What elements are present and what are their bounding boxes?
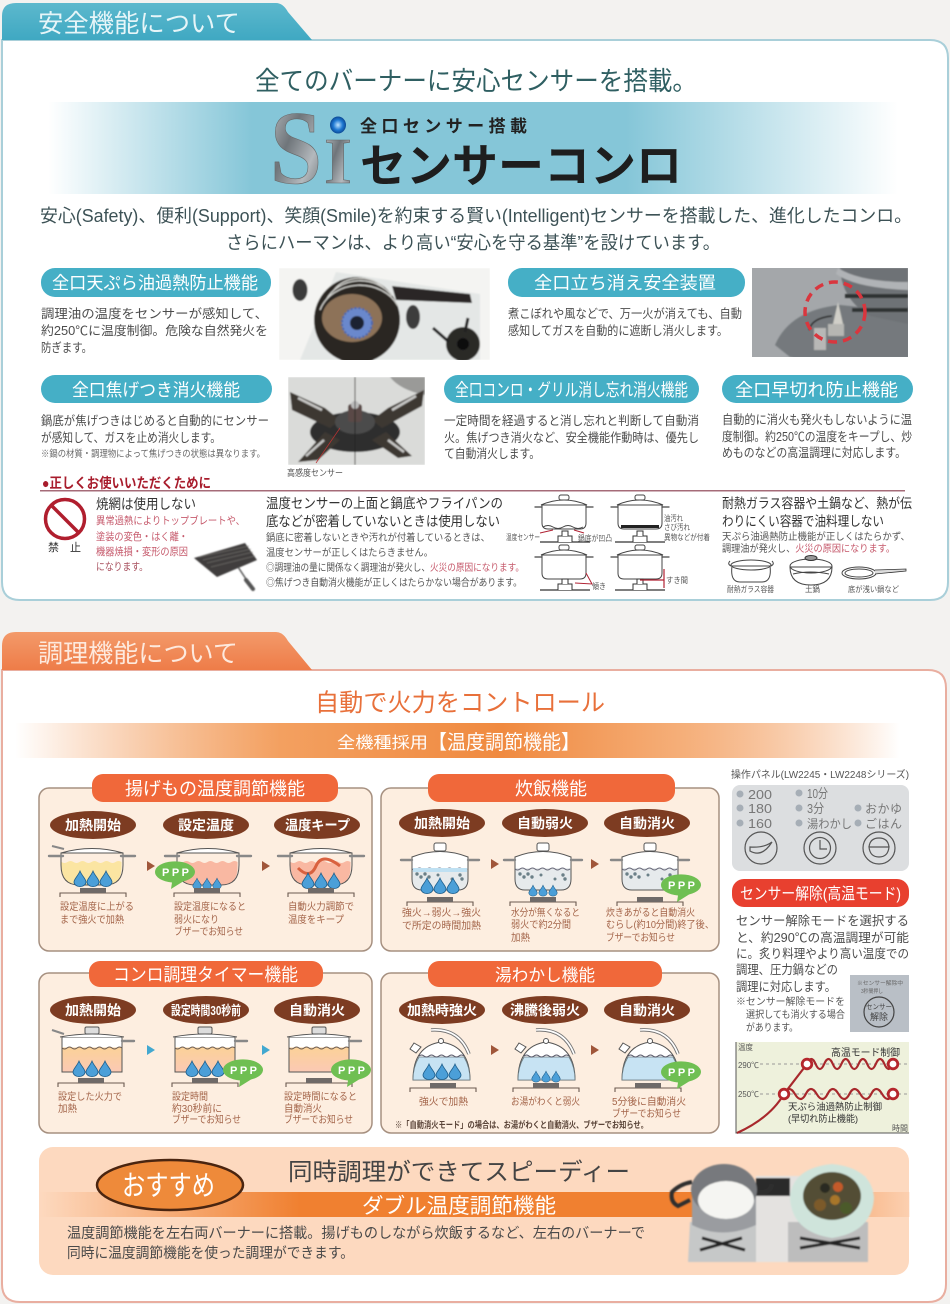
diagram: uneven pot base: 鍋底が凹凸 (578, 533, 612, 543)
panel title (92, 774, 338, 802)
feature heading pill (41, 268, 271, 297)
step: 30 seconds before set time: 設定時間 (172, 1091, 208, 1103)
feature text (41, 306, 268, 355)
step: auto off: 炊きあがると自動消火 (606, 906, 695, 919)
feature heading pill: 全口早切れ防止機能 (735, 380, 898, 400)
diagram: uneven pot base (506, 495, 612, 543)
warning text (266, 531, 524, 589)
step: heating start: 設定温度に上がる (60, 900, 134, 913)
diagram: dirty pot base: 異物などが付着 (664, 532, 710, 542)
step: auto off: 自動消火 (284, 1102, 322, 1115)
step: heating start: 設定した火力で (58, 1090, 122, 1103)
arrow (262, 1045, 270, 1055)
intro text (40, 206, 912, 253)
warning text (96, 514, 245, 573)
step: set temperature: 設定温度になると (174, 900, 246, 913)
section tab: safety (2, 3, 312, 40)
feature text: て自動消火します。 (444, 447, 540, 461)
photo: sensor release button: センサー (866, 1003, 892, 1011)
step: auto off: ブザーでお知らせ (606, 931, 675, 944)
feature: early shut-off prevention (40, 375, 913, 594)
step: auto off: 5分後に自動消火 (612, 1095, 686, 1108)
section tab: cooking (2, 632, 312, 670)
feature heading pill (722, 375, 913, 403)
feature text: 感知してガスを自動的に遮断し消火します。 (508, 323, 728, 338)
arrow (147, 861, 155, 871)
icon: earthenware pot: 土鍋 (805, 584, 820, 594)
step: auto off: PPP (338, 1065, 365, 1077)
feature text: 鍋底が焦げつきはじめると自動的にセンサー (41, 413, 269, 428)
step: set temperature: 弱火になり (174, 914, 219, 926)
heading pill: sensor release (732, 879, 909, 907)
step: heating start: 強火→弱火→強火 (402, 906, 481, 919)
photo: sensor release button: ※センサー解除中 (857, 979, 903, 987)
warning heading (266, 496, 503, 529)
panel: water boiling (381, 961, 719, 1133)
chart: temperature control: (早切れ防止機能) (788, 1113, 858, 1125)
step: auto off: PPP (668, 1067, 695, 1079)
feature heading pill (41, 375, 272, 403)
warning text: 天ぷら油過熱防止機能が正しくはたらかず、 (722, 530, 910, 543)
icon: blue sensor dot (330, 116, 346, 134)
warning text: になります。 (96, 561, 148, 573)
panel title: 湯わかし機能 (495, 966, 595, 985)
logo: Si: I (324, 125, 352, 198)
step: strong flame (399, 996, 485, 1108)
icon: glass container (727, 560, 774, 594)
step: auto off (274, 996, 371, 1126)
chart: temperature control: 高温モード制御 (831, 1046, 900, 1059)
step: 30 seconds before set time: 設定時間30秒前 (171, 1003, 241, 1018)
heading: automatic flame control: 自動で火力をコントロール (315, 689, 605, 717)
icon: timer button (804, 832, 836, 864)
diagram: dirty pot base (611, 495, 710, 542)
badge: recommended: おすすめ (122, 1170, 215, 1201)
panel: cooking features (2, 632, 946, 1302)
panel: safety features (2, 3, 950, 600)
sensor release text: センサー解除モードを選択する (736, 914, 909, 928)
feature heading pill: 全口立ち消え安全装置 (534, 273, 716, 293)
control panel: おかゆ (865, 802, 902, 816)
description: 温度調節機能を左右両バーナーに搭載。揚げものしながら炊飯するなど、左右のバーナーで (67, 1224, 645, 1242)
warning: sensor contact (266, 495, 710, 591)
step: strong flame: 加熱時強火 (407, 1002, 478, 1018)
step: temperature keep: 温度をキープ (288, 913, 344, 926)
panel title (89, 961, 323, 987)
panel title (428, 961, 662, 987)
description (67, 1224, 645, 1262)
warning heading: わりにくい容器で油料理しない (722, 513, 884, 529)
step: temperature keep: 温度キープ (285, 818, 350, 833)
icon: shallow pan: 底が浅い鍋など (848, 584, 899, 594)
step: auto low flame: 水分が無くなると (511, 906, 580, 919)
sensor release text (736, 914, 910, 1034)
warning text: 温度センサーが正しくはたらきません。 (266, 546, 433, 559)
step: auto off: むらし(約10分間)終了後、 (606, 918, 714, 931)
step: heating start: 加熱開始 (65, 1002, 122, 1018)
feature text: 火。焦げつき消火など、安全機能作動時は、優先し (444, 430, 699, 445)
warning text: 機器焼損・変形の原因 (96, 545, 188, 558)
control panel: 180 (748, 801, 772, 816)
sensor release text: 調理に対応します。 (736, 980, 836, 994)
panel title: 炊飯機能 (515, 779, 587, 799)
warning text: ◎調理油の量に関係なく調理油が発火し、火災の原因になります。 (266, 561, 524, 574)
feature text: が感知して、ガスを止め消火します。 (41, 430, 221, 445)
warning heading: 耐熱ガラス容器や土鍋など、熱が伝 (722, 495, 912, 511)
sidebar: control panel and sensor release (731, 768, 910, 1133)
heading: simultaneous cooking: 同時調理ができてスピーディー (288, 1159, 630, 1186)
panel title: コンロ調理タイマー機能 (113, 965, 298, 985)
diagram: dirty pot base: 油汚れ (664, 513, 683, 523)
chart: temperature control: 温度 (738, 1042, 753, 1052)
step: 30 seconds before set time: ブザーでお知らせ (172, 1113, 241, 1126)
step: heating start: 加熱 (58, 1102, 77, 1115)
panel: cooktop timer (39, 961, 372, 1133)
banner: temperature control function: 全機種採用 (337, 734, 428, 752)
photo: sensor release button: 3秒間押し (861, 987, 883, 995)
diagram: gap under pot (611, 545, 688, 590)
step: auto low flame: 自動弱火 (517, 815, 574, 831)
chart: temperature control: 時間 (892, 1124, 908, 1133)
panel title: 揚げもの温度調節機能 (125, 779, 305, 799)
footnote: ※「自動消火モード」の場合は、お湯がわくと自動消火、ブザーでお知らせ。 (395, 1119, 648, 1130)
feature heading pill: 全口焦げつき消火機能 (72, 380, 240, 400)
chart: temperature control (736, 1042, 909, 1133)
step: auto off (604, 809, 714, 944)
curve: 250 degree wave (784, 1089, 893, 1099)
step: heating start (399, 809, 485, 932)
feature: tempura oil overheat prevention (41, 268, 271, 355)
feature heading pill: 全口コンロ・グリル消し忘れ消火機能 (455, 380, 688, 400)
icon: earthenware pot (790, 556, 832, 594)
chart: temperature control: 250℃ (738, 1090, 759, 1099)
step: 30 seconds before set time (163, 996, 263, 1126)
step: low flame after boiling: 沸騰後弱火 (510, 1002, 581, 1018)
panel: rice cooking (381, 774, 719, 951)
photo: pan on burner (279, 268, 490, 363)
feature heading pill (508, 268, 745, 297)
label: prohibited: 禁止 (48, 541, 81, 554)
control panel: 10分 (807, 786, 828, 801)
arrow (491, 859, 499, 869)
step: auto low flame: 加熱 (511, 931, 530, 944)
step: low flame after boiling (502, 996, 588, 1108)
sensor release text: と、約290℃の高温調理が可能 (736, 930, 910, 945)
warning text: 異常過熱によりトップブレートや、 (96, 514, 245, 527)
icon: shallow pan (842, 567, 906, 594)
band: double temperature control (39, 1192, 910, 1218)
arrow (491, 1045, 499, 1055)
heading: sensors on all burners: 全てのバーナーに安心センサーを搭載。 (255, 66, 697, 96)
photo: sensor release button (850, 975, 909, 1032)
warning: do not use grill net (46, 496, 257, 589)
feature text (444, 414, 699, 461)
diagram: gap under pot: すき間 (666, 576, 688, 585)
feature text: 自動的に消火も発火もしないように温 (722, 412, 912, 427)
photo: high sensitivity sensor burner (287, 377, 425, 478)
photo: two pots on stove (672, 1164, 874, 1262)
section tab: safety: 安全機能について (38, 10, 240, 38)
intro text: さらにハーマンは、より高い“安心を守る基準”を設けています。 (226, 233, 720, 253)
step: temperature keep: 自動火力調節で (288, 900, 354, 913)
section tab: cooking: 調理機能について (38, 640, 238, 668)
feature text (722, 412, 912, 460)
control panel: 湯わかし (807, 817, 852, 831)
step: auto off: 自動消火 (619, 815, 676, 831)
diagram: uneven pot base: 温度センサー (506, 532, 540, 542)
banner: temperature control function (15, 723, 900, 758)
arrow (147, 1045, 155, 1055)
feature heading pill: 全口天ぷら油過熱防止機能 (52, 273, 258, 293)
step: heating start: まで強火で加熱 (60, 913, 124, 926)
step: set temperature: PPP (162, 867, 189, 879)
step: auto low flame: 弱火で約2分間 (511, 918, 571, 931)
icon: grill net (194, 543, 257, 589)
arrow (591, 1045, 599, 1055)
step: heating start: で所定の時間加熱 (402, 919, 481, 932)
control panel: 200 (748, 787, 772, 802)
arrow (591, 859, 599, 869)
sensor release text: ※センサー解除モードを (736, 995, 845, 1008)
icon: glass container: 耐熱ガラス容器 (727, 584, 774, 594)
warning text: ◎焦げつき自動消火機能が正しくはたらかない場合があります。 (266, 576, 522, 589)
feature text: ※鍋の材質・調理物によって焦げつきの状態は異なります。 (41, 448, 265, 460)
panel: deep-fry temperature control (39, 774, 372, 951)
intro text: 安心(Safety)、便利(Support)、笑顔(Smile)を約束する賢い(Intelligent)センサーを搭載した、進化したコンロ。 (40, 206, 912, 226)
chart: temperature control: 290℃ (738, 1061, 759, 1070)
warning text (722, 530, 910, 555)
diagram: dirty pot base: さび汚れ (664, 522, 690, 532)
feature text: 度制御。約250℃の温度をキープし、炒 (722, 429, 912, 444)
diagram: tilted pot: 傾き (592, 581, 606, 591)
panel title (428, 774, 675, 802)
feature: burn-on extinguish (41, 375, 272, 460)
banner subtitle: 全口センサー搭載 (360, 117, 527, 136)
description: 同時に温度調節機能を使った調理ができます。 (67, 1245, 354, 1262)
chart markers (779, 1059, 898, 1099)
feature text: 約250℃に温度制御。危険な自然発火を (41, 323, 268, 338)
icon: fryer button (745, 832, 777, 864)
step: set temperature: ブザーでお知らせ (174, 925, 243, 938)
step: auto off: ブザーでお知らせ (284, 1113, 353, 1126)
warning text: 調理油が発火し、火災の原因になります。 (722, 542, 895, 555)
band: double temperature control: ダブル温度調節機能 (362, 1195, 556, 1218)
step: auto off: PPP (668, 880, 695, 892)
step: auto off: 設定時間になると (284, 1091, 357, 1103)
logo: Si: S (270, 89, 322, 206)
step: 30 seconds before set time: 約30秒前に (172, 1102, 222, 1115)
feature: forgot-to-turn-off extinguish (444, 375, 699, 461)
step: auto off: ブザーでお知らせ (612, 1107, 681, 1120)
banner: Si sensor cooktop (48, 89, 898, 206)
control panel: 160 (748, 816, 772, 831)
chart: temperature control: 天ぷら油過熱防止制御 (788, 1101, 882, 1113)
control panel: ごはん (865, 816, 902, 831)
step: heating start (50, 996, 136, 1115)
curve: high temperature wave (807, 1059, 893, 1069)
warning heading: 底などが密着していないときは使用しない (266, 513, 500, 529)
photo caption: 高感度センサー (287, 467, 343, 478)
panel: recommended double temperature control (39, 1147, 910, 1275)
feature heading pill (444, 375, 699, 403)
photo: sensor release button: 解除 (870, 1011, 888, 1022)
icon: prohibited (46, 500, 84, 538)
step: auto off: 自動消火 (289, 1002, 346, 1018)
feature text: 防ぎます。 (41, 340, 92, 355)
step: auto off (604, 996, 701, 1120)
caption: control panel: 操作パネル(LW2245・LW2248シリーズ) (731, 768, 909, 781)
feature text: 調理油の温度をセンサーが感知して、 (41, 306, 268, 321)
feature text: めものなどの高温調理に対応します。 (722, 445, 906, 460)
step: auto off: 自動消火 (619, 1002, 676, 1018)
feature text (41, 413, 269, 460)
step: set temperature (155, 811, 251, 938)
step: heating start: 加熱開始 (414, 815, 471, 831)
feature: flame failure safety device (508, 268, 745, 338)
step: heating start: 加熱開始 (65, 817, 122, 833)
step: 30 seconds before set time: PPP (230, 1065, 257, 1077)
sensor release text: 調理、圧力鍋などの (736, 963, 838, 977)
sensor release text: 選択しても消火する場合 (746, 1008, 845, 1021)
control panel: 3分 (807, 801, 824, 816)
step: strong flame: 強火で加熱 (419, 1095, 468, 1108)
sensor release text: があります。 (746, 1021, 798, 1034)
feature text: 一定時間を経過すると消し忘れと判断して自動消 (444, 414, 699, 428)
step: low flame after boiling: お湯がわくと弱火 (511, 1095, 580, 1108)
step: temperature keep (274, 811, 364, 926)
warning heading: 温度センサーの上面と鍋底やフライパンの (266, 496, 503, 511)
banner title: センサーコンロ (360, 140, 682, 192)
warning heading: 焼網は使用しない (96, 496, 196, 512)
step: set temperature: 設定温度 (178, 818, 235, 833)
arrow (262, 861, 270, 871)
sensor release text: に。炙り料理やより高い温度での (736, 946, 909, 961)
banner: temperature control function: 【温度調節機能】 (428, 731, 580, 754)
diagram: tilted pot (535, 545, 606, 591)
curve: heat-up (737, 1064, 807, 1133)
icon: rice button (863, 832, 895, 864)
step: auto low flame (502, 809, 588, 944)
heading pill: sensor release: センサー解除(高温モード) (740, 885, 901, 903)
photo: flame sensor with red circle (752, 268, 908, 357)
badge: recommended (97, 1160, 243, 1210)
control panel (732, 785, 909, 871)
warning heading (722, 495, 912, 529)
warning text: 塗装の変色・はく離・ (96, 530, 188, 543)
heading: for correct use: ●正しくお使いいただくために (42, 475, 211, 491)
warning: heat-resistant glass and earthenware (722, 495, 912, 594)
feature text: 煮こぼれや風などで、万一火が消えても、自動 (508, 306, 742, 321)
warning text: 鍋底に密着しないときや汚れが付着しているときは、 (266, 531, 490, 544)
feature text (508, 306, 742, 338)
step: heating start (49, 811, 136, 926)
